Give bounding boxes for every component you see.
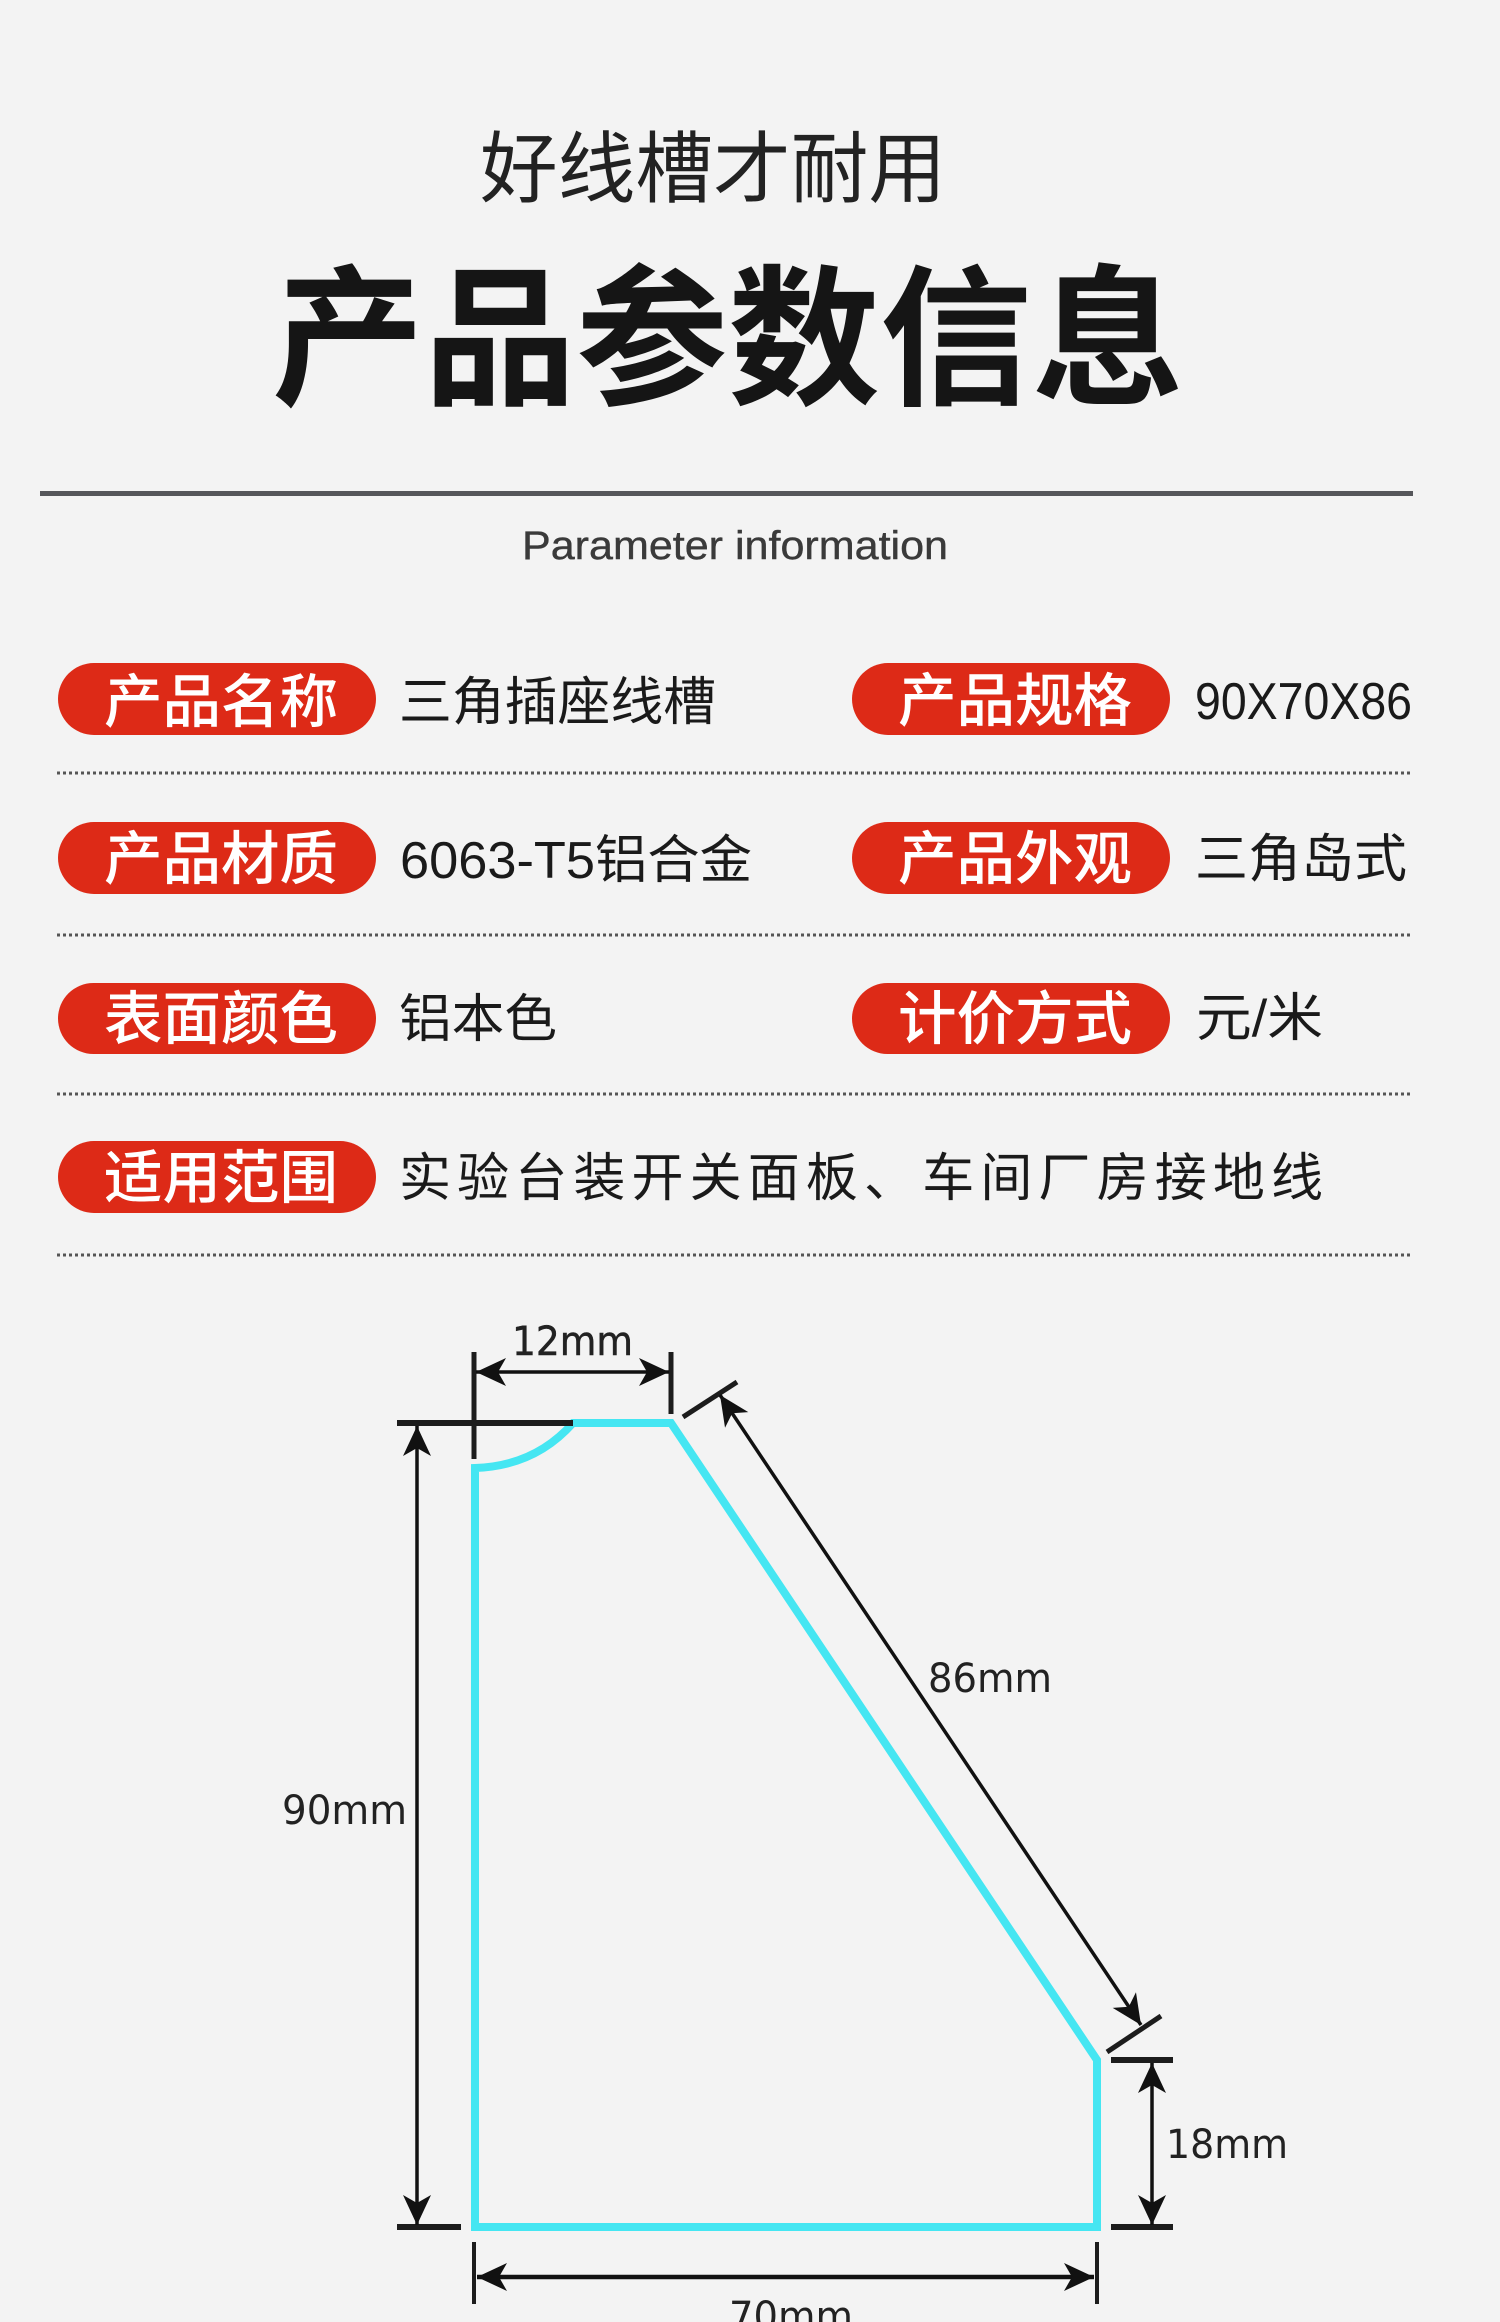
row: scope of use xyxy=(58,1131,1329,1215)
row: product appearance: 产品外观 xyxy=(898,812,1132,896)
row: scope of use: 适用范围 xyxy=(104,1131,338,1215)
dimension: 18mm: 18mm xyxy=(1166,2122,1288,2168)
row: product spec: 90X70X86 xyxy=(1195,673,1412,731)
dimension: 90mm: 90mm xyxy=(282,1788,407,1834)
dimension: 12mm: 12mm xyxy=(512,1319,633,1365)
cross-section dimension diagram xyxy=(282,1319,1288,2322)
row: pricing method xyxy=(852,972,1323,1056)
row: product name: 产品名称 xyxy=(104,655,338,739)
dimension: 86mm xyxy=(683,1382,1161,2052)
row: product material: 6063-T5铝合金 xyxy=(400,832,752,890)
dimension: 86mm: 86mm xyxy=(928,1656,1052,1702)
row: pricing method: 元/米 xyxy=(1196,990,1323,1048)
english subtitle: Parameter information xyxy=(522,524,948,568)
profile outline xyxy=(475,1423,1097,2227)
row: surface colour xyxy=(58,972,557,1056)
header rule xyxy=(40,491,1413,496)
row: product name: 三角插座线槽 xyxy=(399,674,716,732)
row: surface colour: 表面颜色 xyxy=(104,972,338,1056)
row: pricing method: 计价方式 xyxy=(898,972,1132,1056)
header xyxy=(40,125,1413,568)
parameter table xyxy=(57,654,1412,1255)
subtitle: 好线槽才耐用 xyxy=(480,125,946,213)
row: product material: 产品材质 xyxy=(104,812,338,896)
row: product spec: 产品规格 xyxy=(898,654,1132,738)
row: product appearance xyxy=(852,812,1407,896)
row: product material xyxy=(58,812,752,896)
main title: 产品参数信息 xyxy=(272,217,1184,437)
row: product spec xyxy=(852,654,1412,738)
row: product name xyxy=(58,655,716,739)
row: surface colour: 铝本色 xyxy=(399,991,557,1049)
row: scope of use: 实验台装开关面板、车间厂房接地线 xyxy=(399,1150,1329,1208)
row: product appearance: 三角岛式 xyxy=(1195,831,1407,889)
